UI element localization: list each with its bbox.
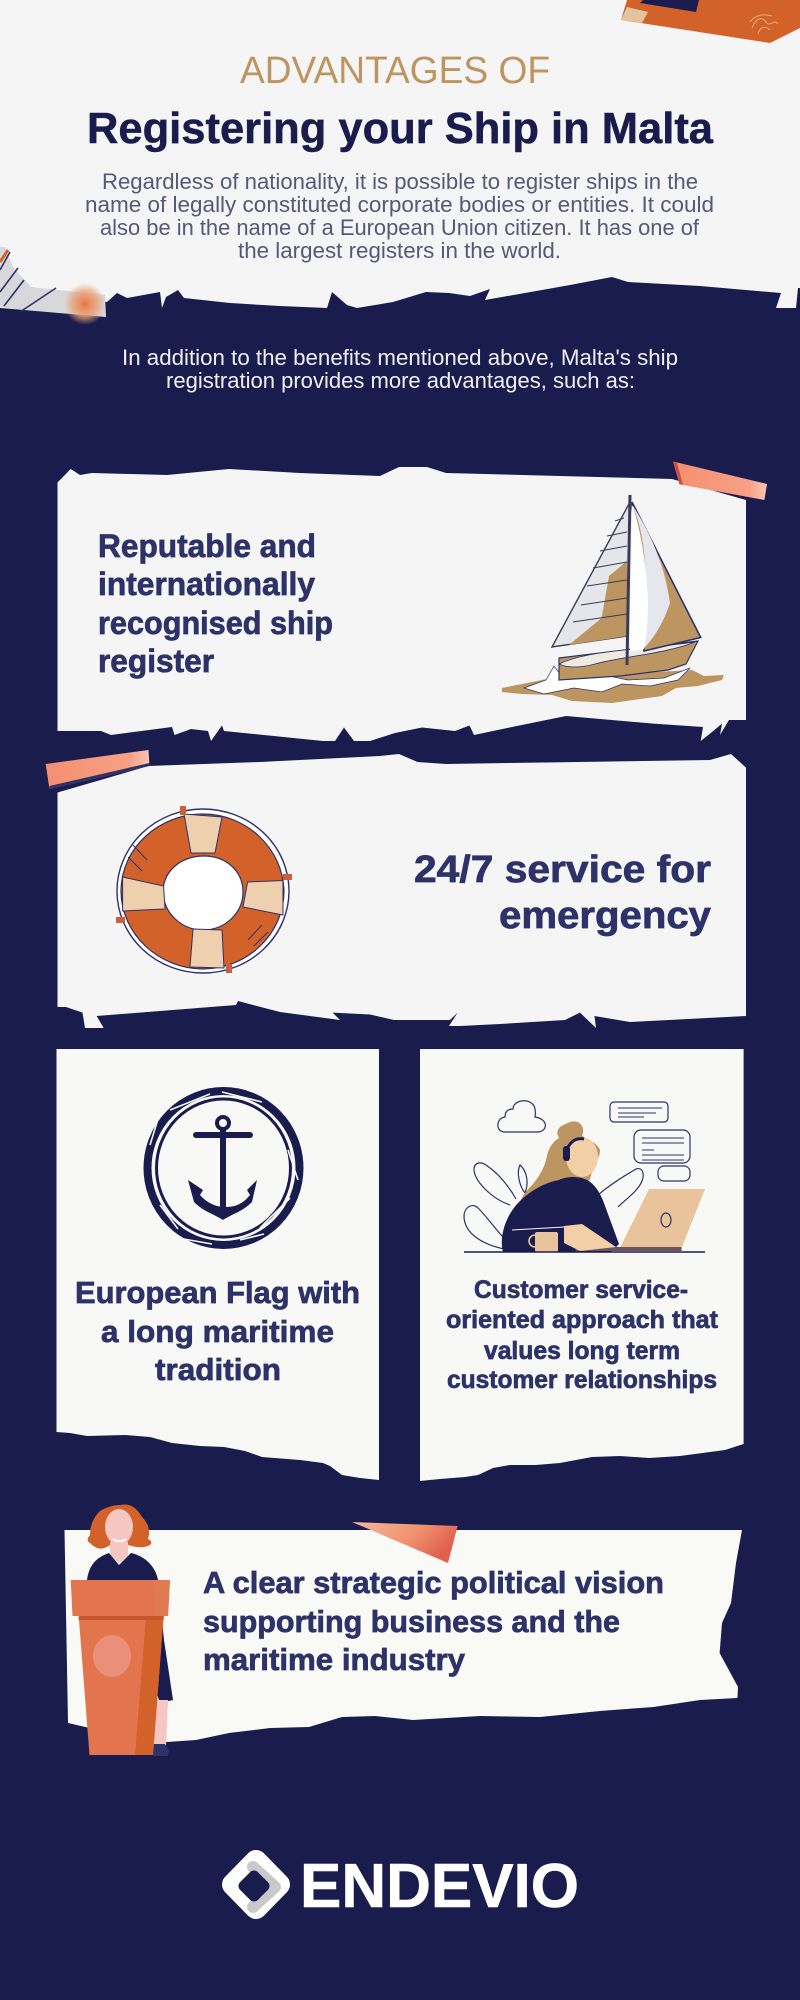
right sail <box>632 502 701 651</box>
heading: customer service <box>446 1276 719 1394</box>
icon: speaker at podium <box>71 1504 173 1756</box>
torn card 2 <box>58 754 746 1028</box>
torn card 3 <box>56 1049 379 1480</box>
intro paragraph: name of legally constituted corporate bodies or entities. It could <box>85 192 714 217</box>
heading: customer service: Customer service- <box>474 1276 688 1304</box>
icon: sailboat <box>502 495 724 703</box>
lead-in text: registration provides more advantages, such as: <box>166 368 635 393</box>
heading: reputable: recognised ship <box>98 605 333 641</box>
logo: endevio <box>233 1852 579 1921</box>
torn card 5 <box>64 1530 742 1742</box>
hull <box>559 641 698 680</box>
icon: anchor seal <box>148 1091 300 1245</box>
heading: reputable: internationally <box>98 566 315 602</box>
icon: logo mark <box>233 1861 279 1908</box>
heading: reputable: register <box>98 643 214 679</box>
panel: customer service <box>420 1049 744 1481</box>
heading: european flag: a long maritime <box>101 1314 334 1349</box>
intro paragraph: also be in the name of a European Union citizen. It has one of <box>100 215 700 240</box>
left sail <box>552 502 630 647</box>
wordmark: ENDEVIO <box>300 1852 579 1921</box>
heading: 24/7 service <box>414 849 711 937</box>
heading: reputable <box>98 528 333 679</box>
tape: card 1 corner <box>673 462 767 500</box>
heading: strategic vision: supporting business and the <box>203 1604 620 1639</box>
panel: reputable register <box>58 462 767 741</box>
heading: european flag: European Flag with <box>75 1275 360 1310</box>
heading: customer service: values long term <box>484 1337 680 1365</box>
title: Registering your Ship in Malta <box>87 104 714 153</box>
icon: support agent illustration <box>464 1101 705 1252</box>
heading: strategic vision <box>203 1565 664 1677</box>
heading: 24/7 service: 24/7 service for <box>414 849 711 891</box>
panel: 24/7 service <box>46 750 746 1028</box>
intro paragraph: Regardless of nationality, it is possible to register ships in the <box>102 169 698 194</box>
heading: reputable: Reputable and <box>98 528 316 564</box>
lead-in text: In addition to the benefits mentioned above, Malta's ship <box>122 345 678 370</box>
heading: customer service: customer relationships <box>447 1366 717 1394</box>
tape: triangle <box>352 1522 458 1563</box>
heading: european flag <box>75 1275 360 1387</box>
panel: strategic vision <box>64 1504 742 1756</box>
tape: card 2 corner <box>46 750 150 789</box>
icon: lifebuoy <box>116 806 292 973</box>
intro paragraph <box>85 169 714 263</box>
intro paragraph: the largest registers in the world. <box>238 238 561 263</box>
header panel <box>0 0 800 325</box>
subtitle: advantages of: ADVANTAGES OF <box>240 50 550 92</box>
lead-in text <box>122 345 678 393</box>
water <box>502 670 724 703</box>
torn card 4 <box>420 1049 744 1481</box>
torn paper header background <box>0 0 800 308</box>
heading: customer service: oriented approach that <box>446 1306 719 1334</box>
heading: strategic vision: A clear strategic political vision <box>203 1565 664 1600</box>
torn card 1 <box>58 467 746 741</box>
heading: 24/7 service: emergency <box>499 895 711 937</box>
heading: strategic vision: maritime industry <box>203 1642 466 1677</box>
tape: top right orange <box>621 0 800 43</box>
heading: european flag: tradition <box>155 1352 281 1387</box>
panel: european flag <box>56 1049 379 1480</box>
tape: left grey with blue stripes <box>0 247 106 325</box>
